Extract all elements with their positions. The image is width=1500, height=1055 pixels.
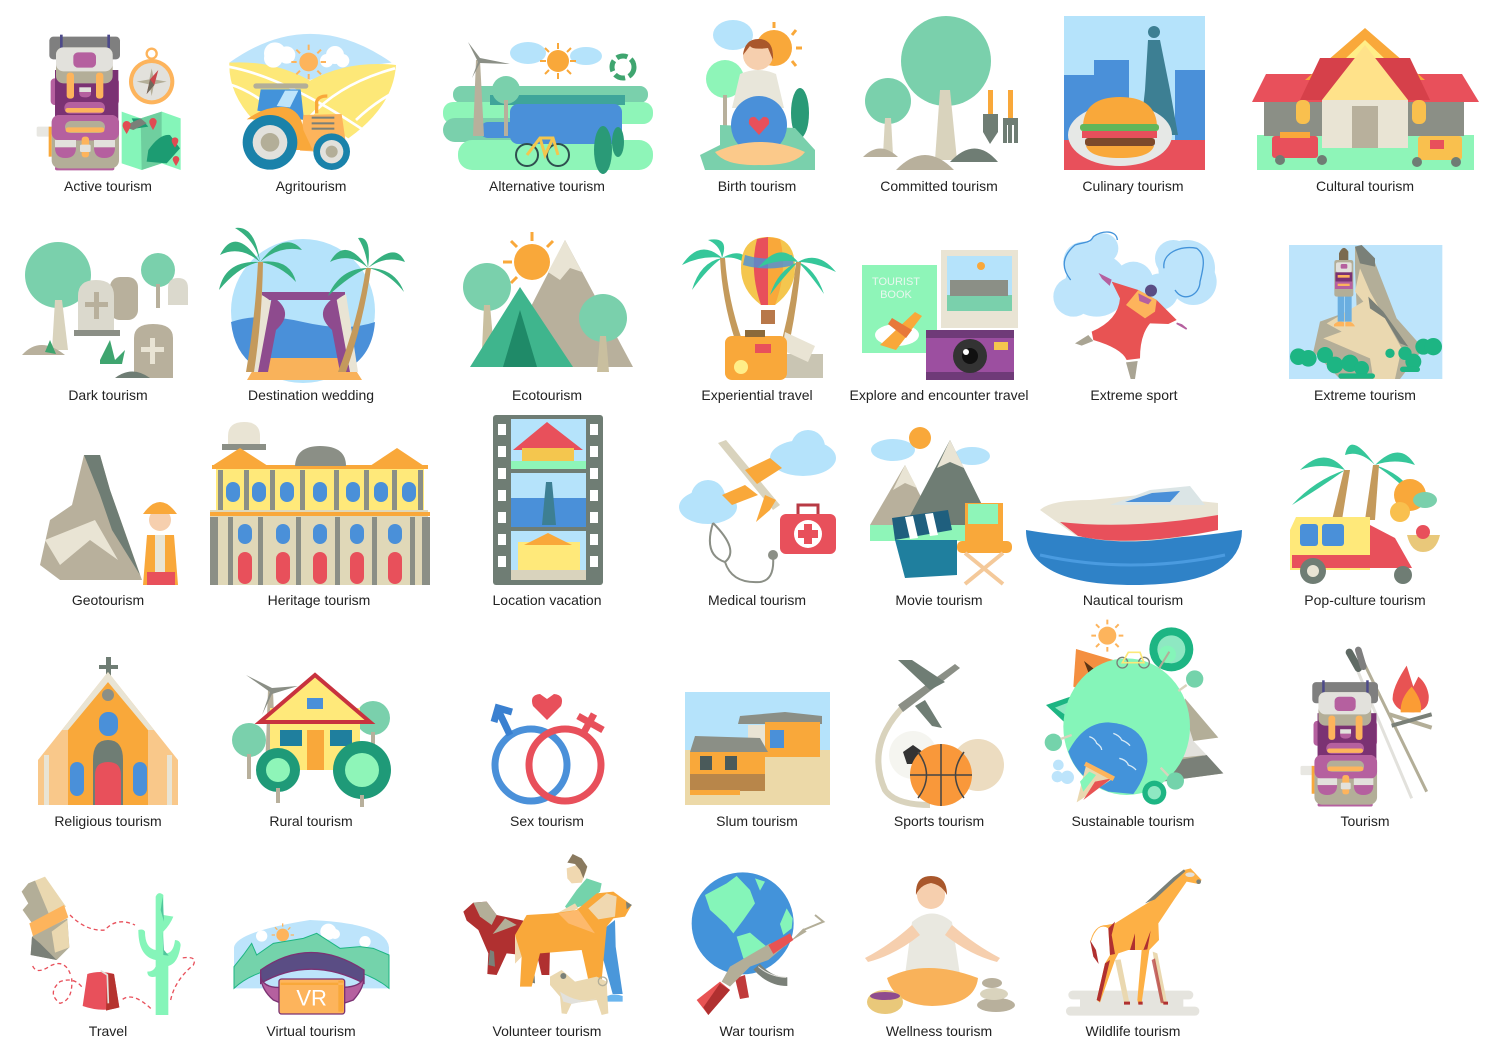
label: Explore and encounter travel (850, 387, 1028, 403)
icon: wellness tourism meditating woman (865, 876, 1015, 1014)
label: Agritourism (276, 178, 346, 194)
label: Tourism (1340, 813, 1390, 829)
icon: heritage tourism palace (210, 422, 430, 585)
label: Dark tourism (68, 387, 148, 403)
icon: virtual tourism VR headset: VR (296, 986, 327, 1011)
icon: destination wedding beach with palms and curtains (219, 228, 405, 383)
icon: extreme tourism climber on cliff (1289, 245, 1442, 379)
label: Active tourism (64, 178, 152, 194)
icon: committed tourism trees and utensils (863, 16, 1018, 170)
icon: religious tourism church (38, 657, 178, 805)
label: Heritage tourism (268, 592, 370, 608)
icon: birth tourism pregnant woman (700, 20, 815, 170)
label: Culinary tourism (1082, 178, 1184, 194)
label: Volunteer tourism (493, 1023, 601, 1039)
label: Sports tourism (894, 813, 984, 829)
icon: pop-culture tourism tuk-tuk and palms (1290, 445, 1440, 584)
icon: ecotourism tent, mountain and sun (463, 232, 633, 372)
icon: volunteer tourism man and dogs (463, 854, 632, 1015)
icon: virtual tourism VR headset (234, 920, 389, 1014)
icon: active tourism backpack, compass and map (37, 35, 181, 170)
label: Pop-culture tourism (1304, 592, 1426, 608)
label: Sustainable tourism (1072, 813, 1194, 829)
label: Medical tourism (708, 592, 806, 608)
icon: alternative tourism landscape (443, 42, 653, 174)
label: Cultural tourism (1316, 178, 1414, 194)
icon: dark tourism graves and trees (22, 242, 188, 378)
label: Experiential travel (701, 387, 813, 403)
label: Committed tourism (880, 178, 998, 194)
label: Extreme sport (1090, 387, 1178, 403)
icon: culinary tourism burger and liberty statue (1064, 16, 1205, 170)
icon: cultural tourism temple and tuk-tuks (1252, 28, 1479, 170)
label: Nautical tourism (1083, 592, 1183, 608)
label: Wildlife tourism (1086, 1023, 1180, 1039)
icon: sex tourism gender symbols and heart (494, 694, 603, 801)
icon: travel statue, fez and cactus (22, 877, 194, 1015)
icon: sports tourism plane and balls (878, 660, 1004, 806)
icon: medical tourism plane, kit and stethoscope (679, 430, 836, 582)
icon: explore and encounter travel book, photo and camera (862, 250, 1018, 380)
label: Sex tourism (510, 813, 584, 829)
label: Travel (89, 1023, 127, 1039)
icon: nautical tourism yacht on waves (1026, 486, 1242, 585)
icon: extreme sport wingsuit flyer over clouds (1053, 232, 1217, 379)
label: Destination wedding (248, 387, 374, 403)
icon: slum tourism shacks (685, 692, 830, 805)
label: Movie tourism (895, 592, 983, 608)
label: Ecotourism (512, 387, 582, 403)
icon: experiential travel balloon, palms and suitcase (682, 237, 836, 380)
label: Slum tourism (716, 813, 798, 829)
label: Wellness tourism (886, 1023, 992, 1039)
icon: wildlife tourism giraffe (1066, 868, 1202, 1016)
label: Extreme tourism (1314, 387, 1416, 403)
label: Geotourism (72, 592, 144, 608)
icon: location vacation film strip (493, 415, 603, 585)
label: Birth tourism (718, 178, 796, 194)
label: Rural tourism (269, 813, 353, 829)
label: Location vacation (493, 592, 601, 608)
icon: explore and encounter travel book, photo and camera: BOOK (880, 289, 913, 301)
label: Virtual tourism (266, 1023, 356, 1039)
label: Alternative tourism (489, 178, 605, 194)
icon: explore and encounter travel book, photo and camera: TOURIST (872, 276, 920, 288)
label: Religious tourism (54, 813, 162, 829)
icon: sustainable tourism globe (1045, 620, 1223, 805)
icon: war tourism globe and rifle (692, 872, 823, 1015)
icon: geotourism rock and guide (40, 455, 178, 585)
icon: movie tourism mountains, clapper and chair (870, 427, 1012, 584)
icon: agritourism tractor in fields (228, 34, 396, 170)
label: War tourism (720, 1023, 794, 1039)
icon: rural tourism house, trees and turbine (232, 675, 391, 807)
icon: tourism backpack, poles and campfire (1300, 650, 1432, 806)
